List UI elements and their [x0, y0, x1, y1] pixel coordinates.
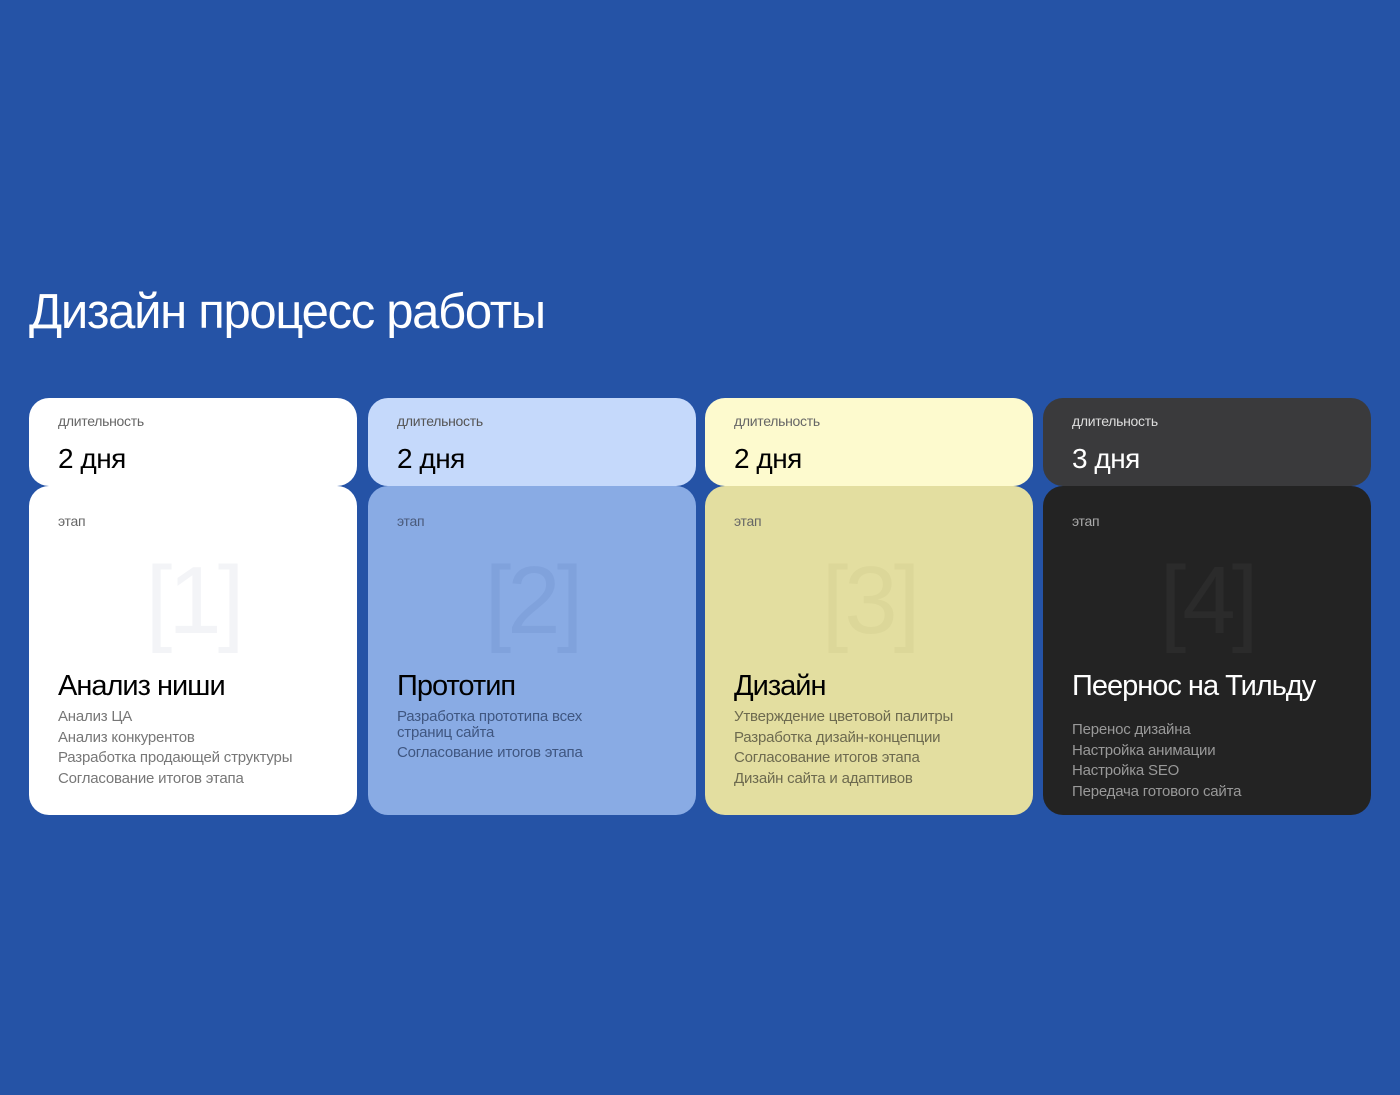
duration panel 2: длительность: [397, 413, 483, 429]
stage panel 1: Согласование итогов этапа: [58, 770, 244, 786]
stage panel 1: [1]: [146, 547, 240, 654]
title: Дизайн процесс работы: [29, 285, 545, 339]
duration panel 2: 2 дня: [397, 443, 465, 474]
stage panel 2: Разработка прототипа всех: [397, 708, 582, 725]
stage panel 4: Настройка SEO: [1072, 762, 1179, 779]
duration panel 1: [29, 398, 357, 486]
stage panel 4: [1043, 486, 1371, 815]
stage panel 1: Анализ ниши: [58, 670, 225, 702]
stage panel 1: Анализ ЦА: [58, 708, 132, 725]
duration panel 4: 3 дня: [1072, 443, 1140, 474]
duration panel 3: длительность: [734, 413, 820, 429]
stage panel 4: Передача готового сайта: [1072, 782, 1241, 800]
stage panel 4: [4]: [1160, 547, 1254, 654]
stage panel 1: [29, 486, 357, 815]
duration panel 1: длительность: [58, 413, 144, 429]
stage panel 4: Перенос дизайна: [1072, 721, 1190, 738]
stage panel 1: Анализ конкурентов: [58, 728, 195, 746]
stage panel 3: [705, 486, 1033, 815]
card 2: [368, 398, 696, 815]
stage panel 1: Разработка продающей структуры: [58, 749, 292, 766]
stage panel 4: этап: [1072, 513, 1099, 529]
card 3: [705, 398, 1033, 815]
duration panel 4: длительность: [1072, 413, 1158, 429]
duration panel 1: 2 дня: [58, 443, 126, 474]
stage panel 4: Настройка анимации: [1072, 742, 1215, 758]
stage panel 4: Пеернос на Тильду: [1072, 670, 1315, 702]
duration panel 2: [368, 398, 696, 486]
stage panel 2: [368, 486, 696, 815]
stage panel 3: Дизайн сайта и адаптивов: [734, 770, 913, 786]
stage panel 2: Согласование итогов этапа: [397, 744, 583, 761]
card 1: [29, 398, 357, 815]
stage panel 3: Согласование итогов этапа: [734, 749, 920, 766]
stage panel 2: [2]: [485, 547, 579, 654]
duration panel 3: 2 дня: [734, 443, 802, 474]
duration panel 3: [705, 398, 1033, 486]
stage panel 3: [3]: [822, 547, 916, 654]
stage panel 1: этап: [58, 513, 85, 529]
duration panel 4: [1043, 398, 1371, 486]
stage panel 3: этап: [734, 513, 761, 529]
stage panel 3: Разработка дизайн-концепции: [734, 728, 940, 746]
stage panel 2: Прототип: [397, 670, 515, 702]
stage panel 3: Утверждение цветовой палитры: [734, 708, 953, 725]
card 4: [1043, 398, 1371, 815]
stage panel 3: Дизайн: [734, 670, 825, 702]
stage panel 2: страниц сайта: [397, 724, 494, 741]
stage panel 2: этап: [397, 513, 424, 529]
